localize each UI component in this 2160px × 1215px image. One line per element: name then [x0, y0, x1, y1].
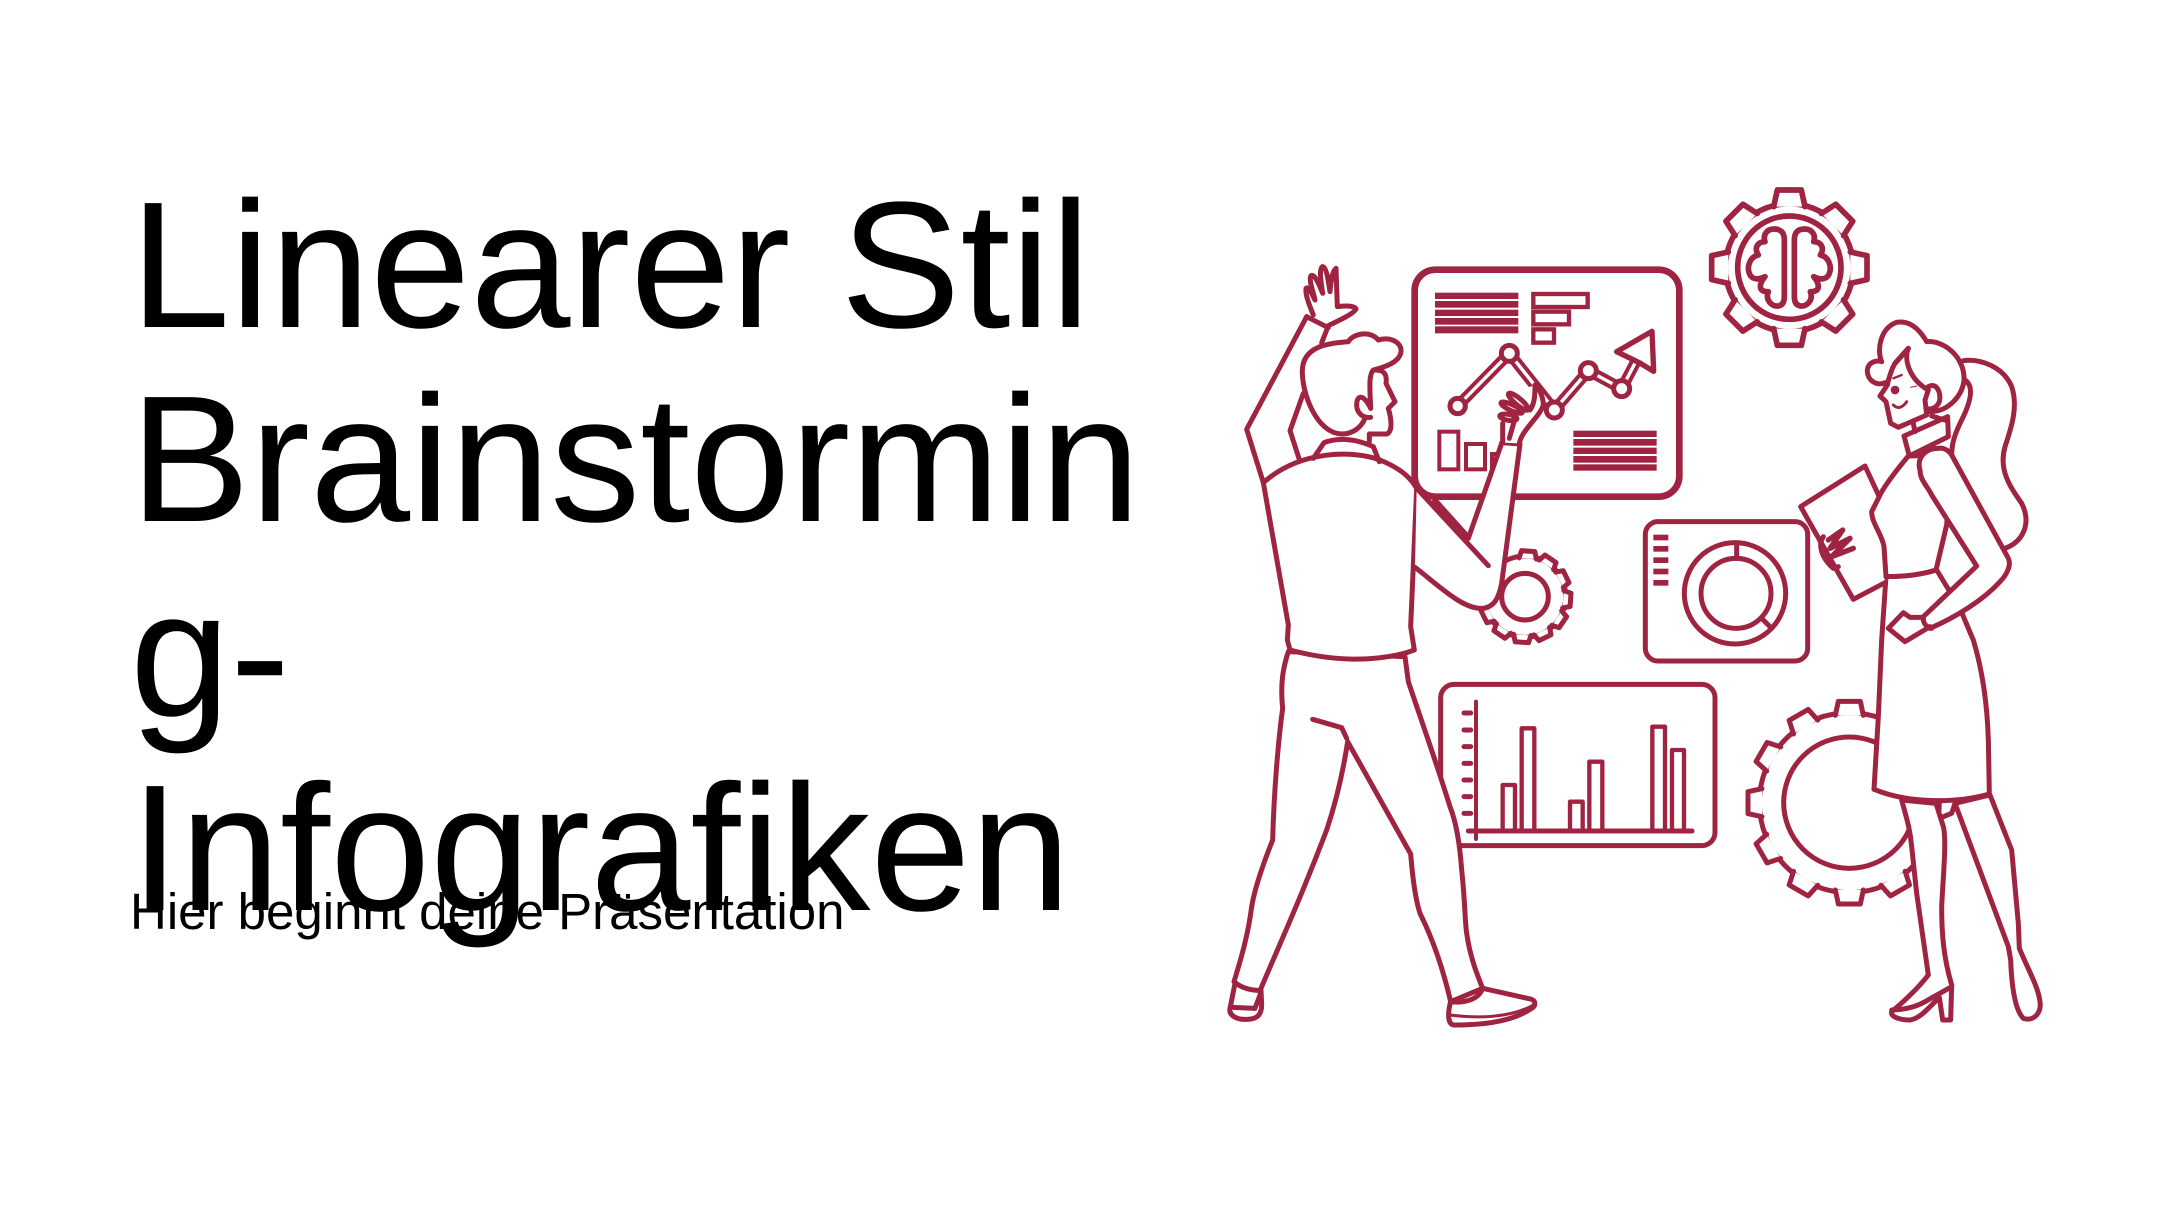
head and hair — [1302, 334, 1401, 442]
reaching hand — [1499, 385, 1543, 443]
text bars top — [1435, 293, 1518, 333]
trousers — [1234, 652, 1483, 1002]
illustration: brainstorming team — [1227, 187, 2043, 1028]
title: Linearer Stil — [130, 165, 1090, 366]
title — [130, 165, 1140, 949]
panel: donut chart card — [1645, 522, 1808, 661]
right shoe — [1449, 988, 1535, 1025]
icon: large gear — [1748, 701, 1944, 904]
brain right lobe — [1794, 229, 1830, 306]
subtitle: Hier beginnt deine Präsentation — [130, 883, 844, 940]
bars — [1503, 727, 1684, 831]
small column chart — [1439, 432, 1509, 469]
rising line with arrow — [1450, 331, 1654, 418]
left shoe — [1230, 983, 1262, 1019]
title: g- — [130, 554, 290, 755]
panel: bar chart card — [1441, 684, 1715, 846]
donut chart — [1684, 543, 1786, 644]
x axis — [1468, 824, 1692, 838]
torso — [1872, 455, 1952, 577]
knee fold — [1313, 719, 1347, 738]
panel: line chart board — [1415, 270, 1679, 497]
y axis with ticks — [1464, 702, 1476, 839]
legs and shoes — [1891, 795, 2040, 1020]
horizontal bars — [1533, 294, 1588, 343]
collar — [1313, 439, 1379, 462]
arm on hip — [1888, 448, 2009, 642]
icon: gear with brain — [1712, 190, 1867, 345]
figure: woman — [1801, 322, 2040, 1020]
raised arm and hand — [1247, 267, 1356, 483]
tablet — [1801, 466, 1885, 599]
figure: man — [1230, 267, 1543, 1025]
title: Infografiken — [130, 748, 1071, 949]
turtleneck collar — [1904, 416, 1948, 456]
torso — [1263, 454, 1417, 659]
legend bars — [1653, 535, 1668, 586]
ponytail — [1963, 360, 2026, 548]
head and hair — [1867, 322, 1964, 427]
reaching arm — [1415, 443, 1520, 608]
skirt — [1874, 570, 1989, 801]
text bars bottom — [1573, 431, 1657, 471]
title: Brainstormin — [130, 359, 1140, 560]
hand on tablet — [1821, 530, 1853, 568]
icon: small gear — [1480, 551, 1571, 643]
brain left lobe — [1748, 229, 1784, 306]
